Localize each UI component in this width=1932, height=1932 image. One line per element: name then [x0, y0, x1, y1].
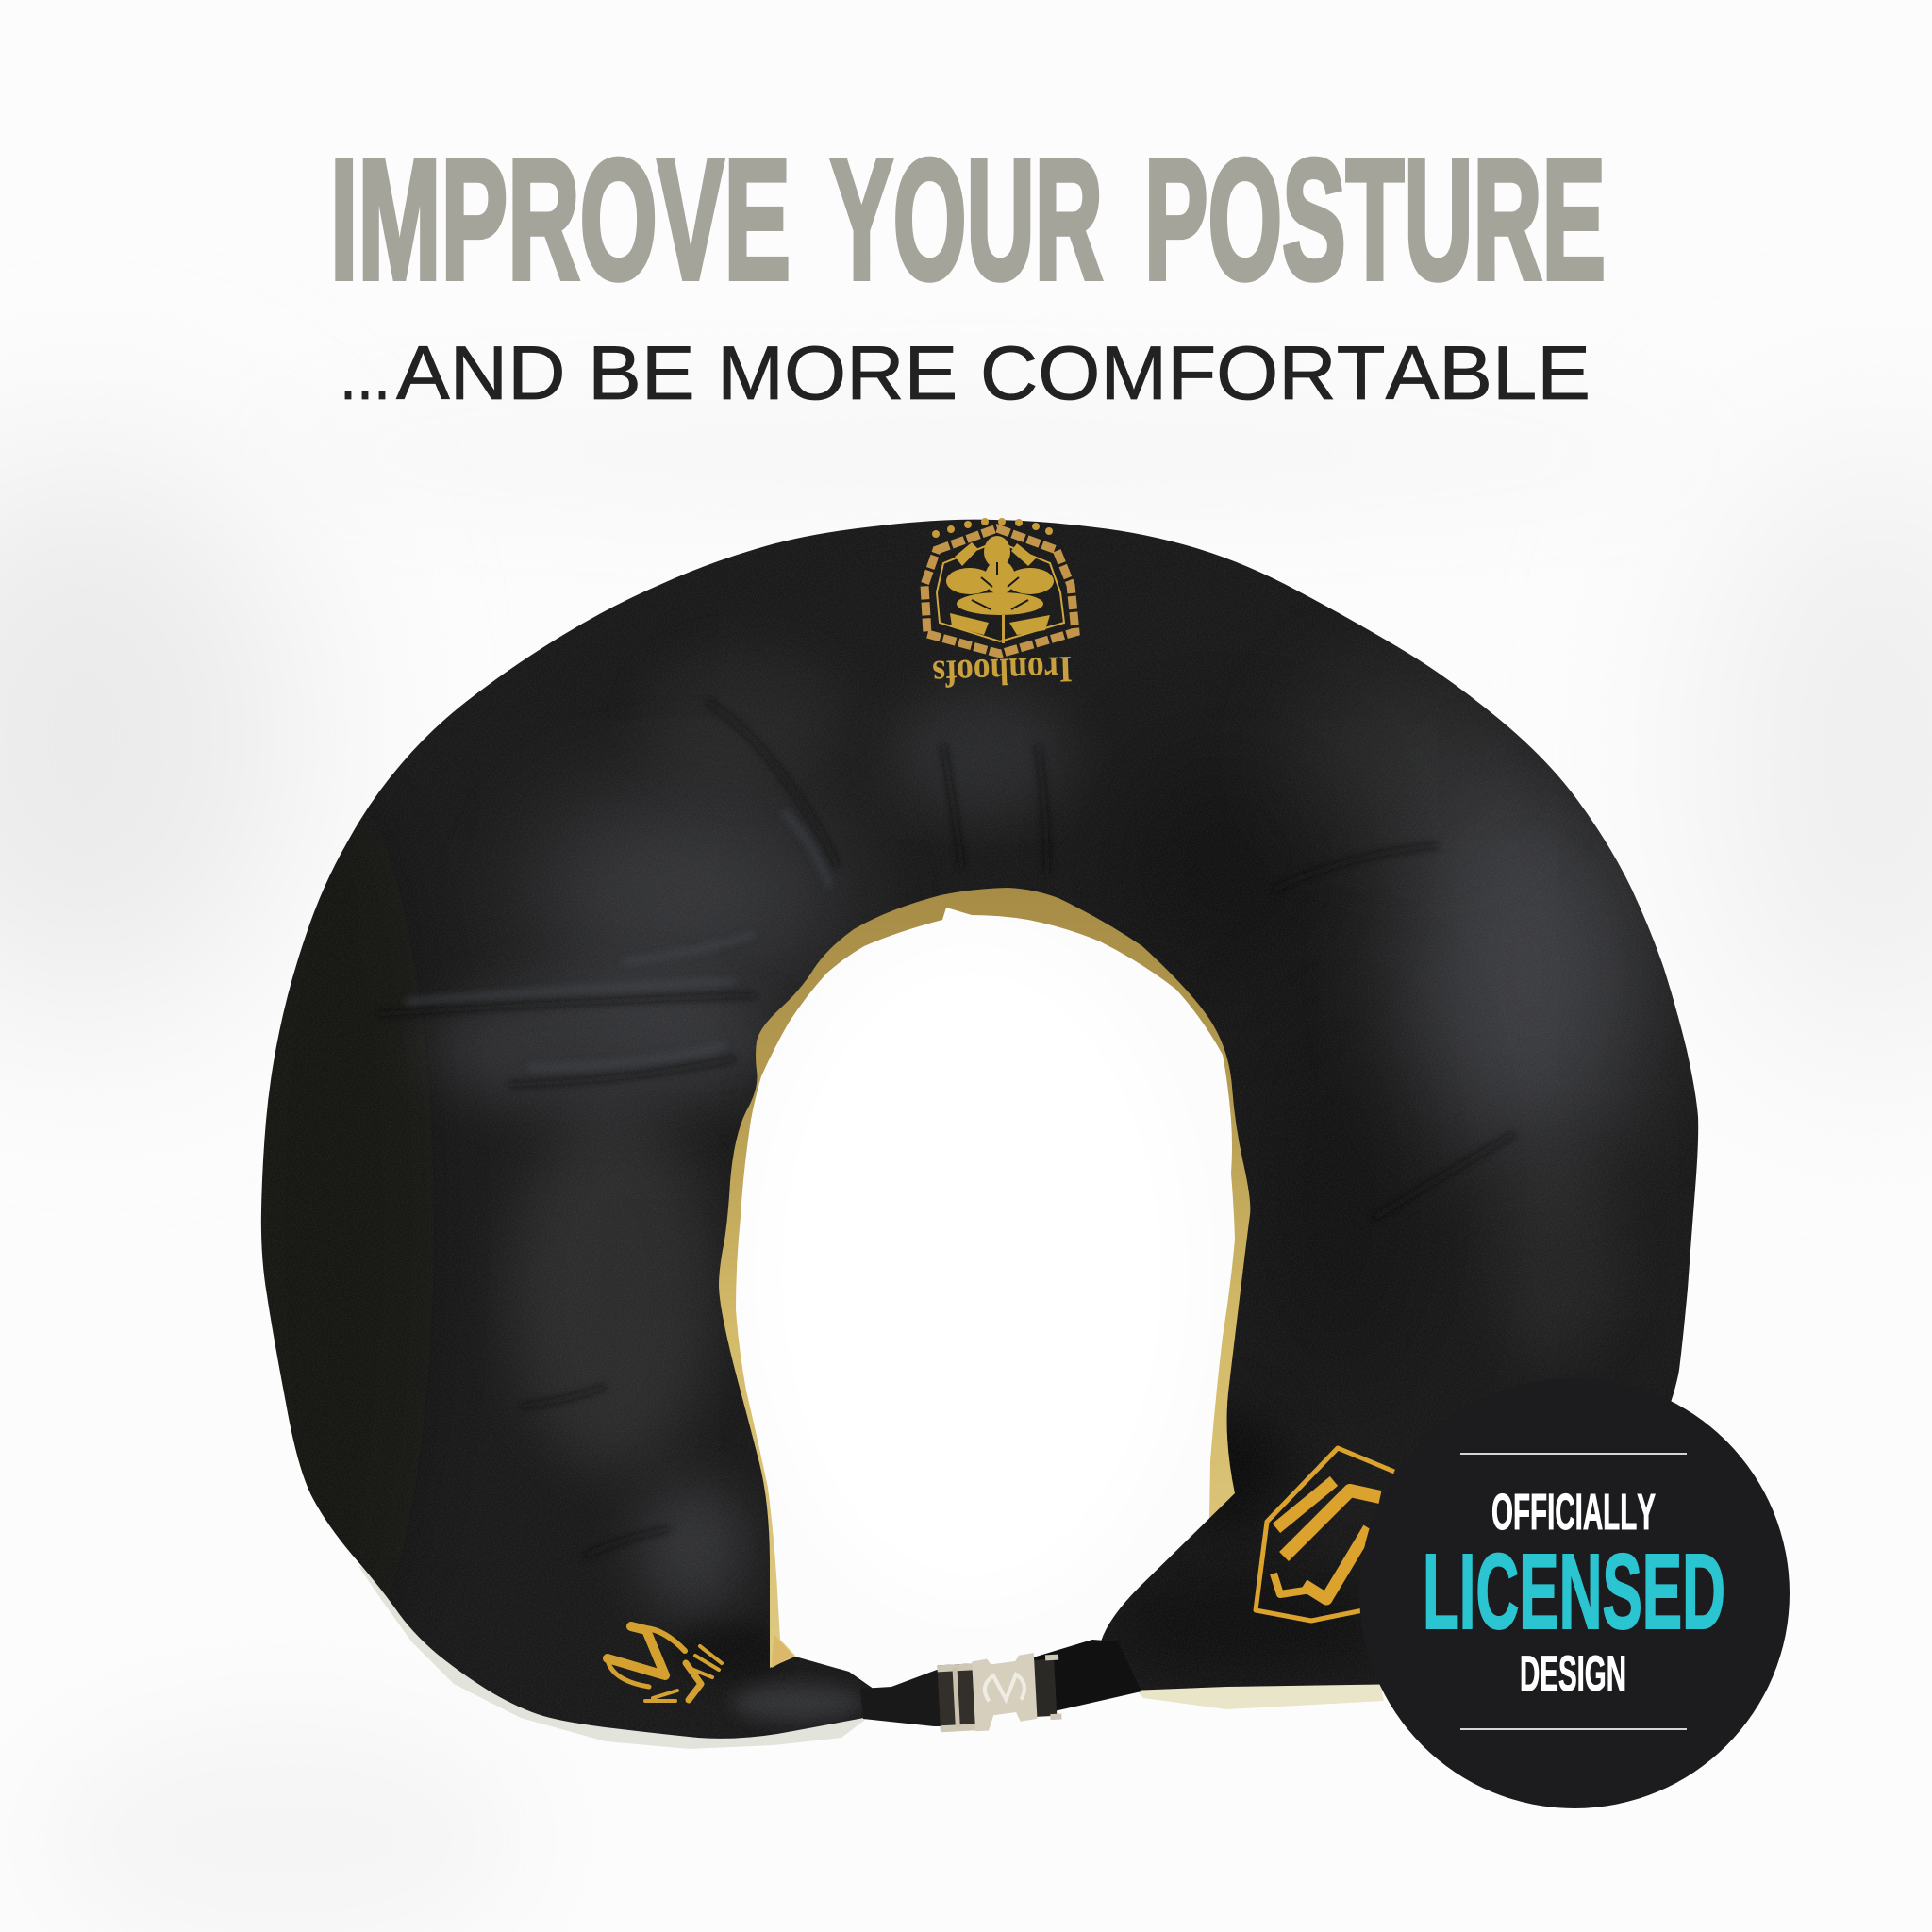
shield embroidery: right arm: [1256, 1448, 1394, 1621]
crest embroidery: top: [924, 518, 1075, 695]
title: IMPROVE: [330, 125, 791, 315]
buckle logo: [984, 1674, 1025, 1702]
tan inner lining: [708, 873, 1269, 1712]
small logo embroidery: left arm: [608, 1626, 722, 1701]
badge circle: [1359, 1378, 1790, 1808]
badge line: officially: OFFICIALLY: [1491, 1484, 1656, 1541]
badge top rule: [1460, 1453, 1687, 1455]
badge: [1359, 1378, 1790, 1808]
badge line: design: DESIGN: [1520, 1646, 1626, 1702]
crest lettering, upside down: Ironhoofs: [932, 648, 1073, 695]
cream piping: left arm: [358, 1566, 873, 1749]
badge bottom rule: [1460, 1728, 1687, 1730]
neck pillow: [245, 509, 1717, 1755]
fabric shading: [245, 509, 1717, 1755]
buckle: [937, 1652, 1062, 1733]
strap left: [860, 1670, 948, 1726]
pillow body: [261, 520, 1698, 1739]
title: [330, 125, 1606, 315]
strap right: [1033, 1640, 1141, 1717]
subtitle: AND BE MORE COMFORTABLE: [396, 331, 1591, 416]
tan corner at left arm: [772, 1634, 793, 1668]
cream piping: right arm: [1122, 1670, 1384, 1709]
title: YOUR: [830, 125, 1103, 315]
subtitle: ...: [340, 331, 391, 416]
